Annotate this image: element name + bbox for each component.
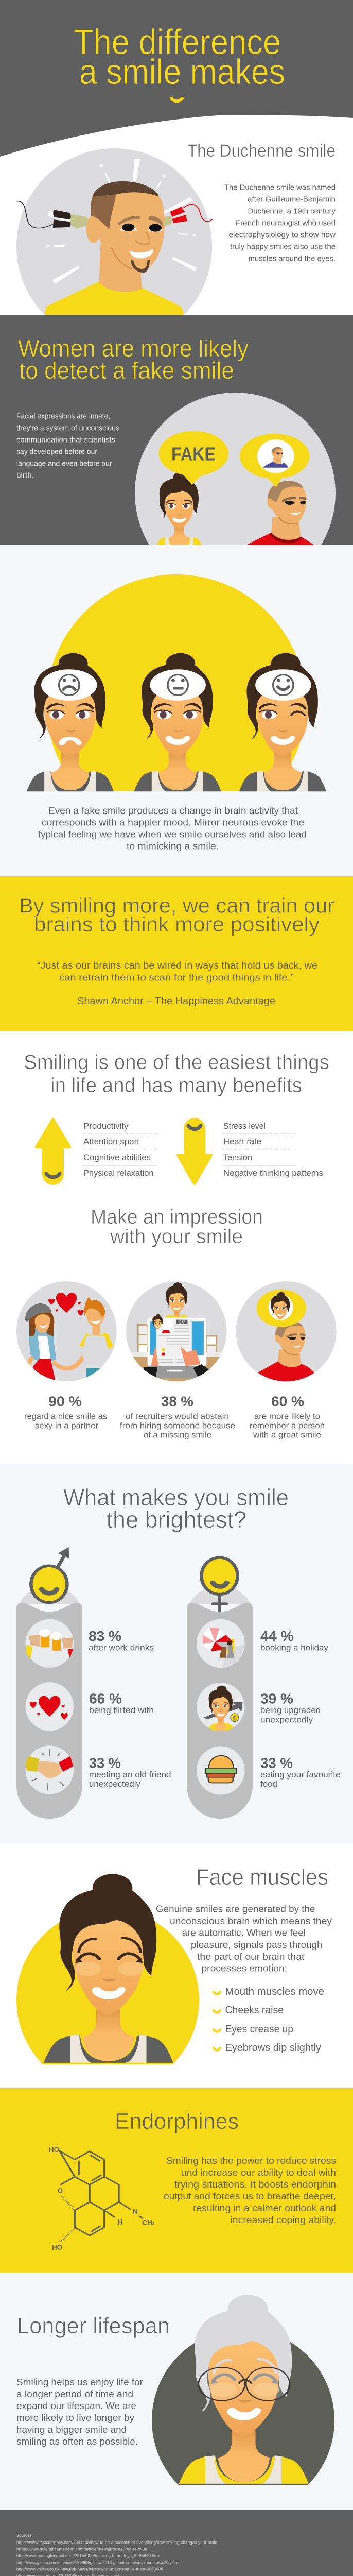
stat: 33 percent favourite food (260, 1755, 341, 1789)
heading: Face muscles: Face muscles (196, 1865, 328, 1890)
heading: train our brains: By smiling more, we can train our (19, 893, 334, 917)
text: endorphines paragraph: Smiling has the power to reduce stress (166, 2155, 336, 2166)
text: face muscles paragraph: the part of our brain that (197, 1951, 305, 1962)
circle: couple in love (16, 1281, 117, 1382)
text: facial expressions paragraph: language and even before our (16, 460, 112, 468)
stat: 83 percent after work drinks: 83 % (89, 1628, 121, 1644)
statistic: 60 percent (250, 1393, 325, 1439)
quote: Shawn Anchor (37, 960, 317, 1006)
stat: 39 percent being upgraded: unexpectedly (260, 1716, 313, 1725)
illustration: woman and man with speech bubbles (135, 393, 336, 545)
stat: 39 percent being upgraded (260, 1691, 321, 1725)
section background: footer (0, 2510, 353, 2576)
thought bubble: man portrait (240, 434, 310, 487)
heading: smiling benefits (24, 1051, 329, 1097)
heading: Women are more likely to detect a fake smile (18, 335, 249, 384)
heading: Women are more likely to detect a fake smile: to detect a fake smile (19, 357, 234, 384)
list: things that increase: Cognitive abilities (83, 1153, 151, 1162)
list: things that decrease: Tension (223, 1153, 252, 1162)
text: Duchenne paragraph: French neurologist who used (236, 218, 336, 228)
text: endorphines paragraph: trying situations. It boosts endorphin (174, 2179, 336, 2190)
text: sources list: http://www.huffingtonpost.com/2015/02/08/smiling-benefits_n_6598840.html (16, 2553, 160, 2558)
text: lifespan paragraph: more likely to live longer by (16, 2412, 135, 2423)
heading: what makes you smile the brightest (63, 1484, 289, 1533)
icon: up arrow (37, 1120, 69, 1185)
illustration: three women with emoticon thoughts (27, 653, 326, 791)
statistic: 60 percent: with a great smile (253, 1430, 321, 1439)
stat: 33 percent meeting an old friend: meeting an old friend (89, 1770, 171, 1780)
list: things that decrease: Negative thinking patterns (223, 1168, 323, 1178)
chart: gender pillars with icons (16, 1547, 253, 1819)
label: FAKE: FAKE (171, 443, 216, 465)
text: sources list: Sources: (16, 2533, 33, 2538)
heading: make an impression: Make an impression (91, 1206, 263, 1228)
illustration: yellow circle behind three women (50, 574, 301, 791)
illustration: grey-haired woman with glasses (152, 2295, 334, 2485)
text: fake smile paragraph: typical feeling we have when we smile ourselves and also lead (38, 828, 307, 840)
quote: Shawn Anchor: can retrain them to scan for the good things in life.” (59, 972, 294, 983)
statistic: 90 percent (24, 1393, 107, 1430)
text: lifespan paragraph: having a bigger smile and (16, 2424, 127, 2435)
stat: 33 percent meeting an old friend: unexpectedly (89, 1780, 141, 1789)
text: lifespan paragraph: expand our lifespan. We are (16, 2400, 136, 2411)
quote: Shawn Anchor: Shawn Anchor – The Happiness Advantage (77, 995, 275, 1006)
title (74, 22, 285, 92)
circle: recruiter with CV (126, 1281, 227, 1382)
stat: 33 percent meeting an old friend (89, 1755, 171, 1789)
stat: 44 percent booking a holiday: 44 % (260, 1628, 294, 1644)
heading: make an impression: with your smile (110, 1226, 243, 1248)
chart: endorphin molecule diagram (60, 2151, 143, 2243)
text: sources list (16, 2533, 270, 2576)
list: things that increase: Physical relaxation (83, 1168, 153, 1178)
text: fake smile paragraph: corresponds with a happier mood. Mirror neurons evoke the (42, 817, 304, 827)
labels: molecule atoms: HO (49, 2145, 59, 2154)
list: things that decrease (223, 1122, 323, 1178)
section background: women detect fake smile (0, 315, 353, 545)
statistic: 38 percent (120, 1393, 235, 1439)
list: muscle movements: Eyebrows dip slightly (225, 2042, 321, 2054)
labels: molecule atoms: N (133, 2208, 138, 2216)
section background: dark header with curve (0, 0, 353, 157)
label: CV tag (177, 1320, 187, 1324)
text: sources list: https://www.fastcompany.com/3041438/how-to-be-a-success-at-everything/how-smiling-changes-your-brain (16, 2539, 217, 2545)
text: Duchenne paragraph: electrophysiology to show how (228, 231, 336, 239)
icon: title smile (171, 98, 182, 101)
text: Duchenne paragraph (224, 183, 336, 263)
text: Duchenne paragraph: after Guillaume-Benjamin (248, 195, 336, 204)
woman: winking (239, 653, 326, 791)
stat: 33 percent favourite food: eating your favourite (260, 1770, 341, 1780)
icon: handshake (25, 1745, 74, 1794)
list: muscle movements: Cheeks raise (225, 2005, 284, 2016)
text: Duchenne paragraph: truly happy smiles also use the (230, 242, 336, 251)
label: CV tag: CV (178, 1320, 185, 1324)
illustration: three impression circles (16, 1281, 337, 1383)
labels: molecule atoms: CH3 (142, 2218, 155, 2227)
text: Duchenne paragraph: The Duchenne smile was named (224, 183, 336, 192)
text: endorphines paragraph: increased coping ability. (231, 2214, 336, 2225)
text: endorphines paragraph (164, 2155, 336, 2225)
list: muscle movements: Eyes crease up (225, 2024, 293, 2035)
stat: 66 percent being flirted with: being flirted with (89, 1706, 154, 1715)
speech bubble: FAKE (158, 431, 228, 485)
text: facial expressions paragraph: say developed before our (16, 447, 97, 456)
stat: 39 percent being upgraded: being upgraded (260, 1706, 321, 1715)
statistic: 60 percent: are more likely to (254, 1412, 320, 1421)
text: fake smile paragraph: to mimicking a smile. (127, 841, 219, 851)
heading: make an impression (91, 1206, 263, 1248)
quote: Shawn Anchor: “Just as our brains can be wired in ways that hold us back, we (37, 960, 317, 971)
heading: what makes you smile the brightest: What makes you smile (63, 1484, 289, 1511)
illustration: smiling woman on yellow circle (16, 1874, 199, 2064)
icon: woman with upgrade arrow: € (233, 1716, 236, 1721)
pillar: male (16, 1547, 82, 1819)
statistic: 60 percent: 60 % (271, 1393, 304, 1410)
text: lifespan paragraph: a longer period of time and (16, 2388, 133, 2399)
text: facial expressions paragraph: they're a system of unconscious (16, 423, 119, 433)
heading: Longer lifespan: Longer lifespan (17, 2313, 170, 2338)
icon: beer mugs (25, 1619, 74, 1668)
heading: train our brains: brains to think more positively (34, 912, 320, 936)
stat: 44 percent booking a holiday: booking a holiday (260, 1643, 329, 1653)
heading: smiling benefits: in life and has many benefits (50, 1074, 302, 1097)
statistic: 60 percent: remember a person (250, 1421, 325, 1430)
text: endorphines paragraph: resulting in a calmer outlook and (193, 2202, 336, 2213)
section background: endorphines (0, 2088, 353, 2273)
circle: man remembering woman (236, 1281, 337, 1383)
icon: hearts (25, 1682, 74, 1731)
list: muscle movements (214, 1986, 324, 2054)
text: face muscles paragraph: unconscious brain which means they (170, 1916, 332, 1926)
heading: Endorphines: Endorphines (115, 2109, 239, 2134)
stat: 83 percent after work drinks: after work drinks (89, 1643, 154, 1653)
labels: molecule atoms: H (117, 2218, 122, 2227)
text: sources list: http://www.gallup.com/services/189968/gallup-2016-global-emotions-report.aspx?ays=n (16, 2560, 179, 2565)
section background: longer lifespan (0, 2273, 353, 2510)
woman: sad (27, 653, 114, 791)
statistic: 38 percent: of a missing smile (144, 1430, 211, 1439)
text: Duchenne paragraph: muscles around the eyes. (248, 255, 336, 263)
section background: what makes you smile (0, 1464, 353, 1843)
illustration: Duchenne man with electrodes (16, 148, 213, 315)
text: fake smile paragraph (38, 805, 307, 851)
icon: down arrow (178, 1118, 211, 1183)
list: things that decrease: Stress level (223, 1122, 266, 1131)
icon: burger (197, 1746, 245, 1795)
title: a smile makes (79, 52, 285, 92)
text: facial expressions paragraph: Facial expressions are innate, (16, 412, 110, 420)
labels: molecule atoms (49, 2145, 155, 2252)
text: sources list: http://www.mirror.co.uk/news/uk-news/heres-what-makes-smile-most-6863608 (16, 2566, 163, 2571)
woman: neutral (134, 653, 221, 791)
text: face muscles paragraph (156, 1903, 332, 1973)
text: facial expressions paragraph (16, 412, 119, 480)
statistic: 90 percent: sexy in a partner (35, 1421, 99, 1430)
statistic: 38 percent: of recruiters would abstain (126, 1412, 229, 1421)
text: facial expressions paragraph: birth. (16, 471, 34, 480)
stat: 66 percent being flirted with (89, 1691, 154, 1715)
heading: train our brains (19, 893, 334, 936)
stat: 44 percent booking a holiday (260, 1628, 329, 1653)
statistic: 90 percent: regard a nice smile as (24, 1412, 107, 1421)
text: fake smile paragraph: Even a fake smile produces a change in brain activity that (48, 805, 298, 816)
text: lifespan paragraph: smiling as often as possible. (16, 2436, 138, 2447)
labels: molecule atoms: HO (52, 2243, 62, 2252)
section background: fake smile brain activity (0, 545, 353, 876)
section background: yellow quote band (0, 876, 353, 1031)
statistic: 38 percent: 38 % (161, 1393, 193, 1410)
stat: 33 percent favourite food: 33 % (260, 1755, 293, 1771)
text: face muscles paragraph: are automatic. When we feel (182, 1927, 306, 1938)
pillar: female (187, 1557, 253, 1819)
heading: what makes you smile the brightest: the brightest? (106, 1506, 246, 1533)
text: Duchenne paragraph: Duchenne, a 19th century (248, 207, 336, 215)
heading: Women are more likely to detect a fake smile: Women are more likely (18, 335, 249, 362)
title: The difference (74, 22, 281, 62)
text: sources list: https://www.scientificamerican.com/article/the-mirror-neuron-revolut/ (16, 2546, 148, 2551)
stat: 66 percent being flirted with: 66 % (89, 1691, 122, 1706)
heading: smiling benefits: Smiling is one of the easiest things (24, 1051, 329, 1074)
list: muscle movements: Mouth muscles move (225, 1986, 324, 1997)
text: face muscles paragraph: pleasure, signals pass through (191, 1939, 322, 1950)
stat: 83 percent after work drinks (89, 1628, 154, 1653)
text: lifespan paragraph: Smiling helps us enjoy life for (16, 2377, 143, 2387)
list: things that decrease: Heart rate (223, 1137, 261, 1146)
labels: molecule atoms: O (58, 2187, 63, 2195)
list: things that increase: Productivity (83, 1122, 129, 1131)
statistic: 38 percent: from hiring someone because (120, 1421, 235, 1430)
icon: round glasses (199, 2367, 290, 2401)
heading: The Duchenne smile: The Duchenne smile (187, 141, 336, 161)
icon: woman with upgrade arrow (197, 1683, 245, 1732)
statistic: 90 percent: 90 % (48, 1393, 82, 1410)
stat: 33 percent meeting an old friend: 33 % (89, 1755, 121, 1771)
list: things that increase: Attention span (83, 1137, 139, 1146)
stat: 33 percent favourite food: food (260, 1780, 277, 1789)
text: facial expressions paragraph: communication that scientists (16, 436, 115, 444)
text: face muscles paragraph: Genuine smiles are generated by the (156, 1903, 315, 1914)
icon: umbrella (197, 1619, 245, 1668)
text: endorphines paragraph: and increase our ability to deal with (181, 2167, 336, 2178)
text: face muscles paragraph: processes emotion: (202, 1963, 287, 1973)
stat: 39 percent being upgraded: 39 % (260, 1691, 293, 1706)
text: endorphines paragraph: output and forces us to breathe deeper, (164, 2191, 336, 2201)
list: things that increase (83, 1122, 153, 1178)
text: lifespan paragraph (16, 2377, 143, 2447)
